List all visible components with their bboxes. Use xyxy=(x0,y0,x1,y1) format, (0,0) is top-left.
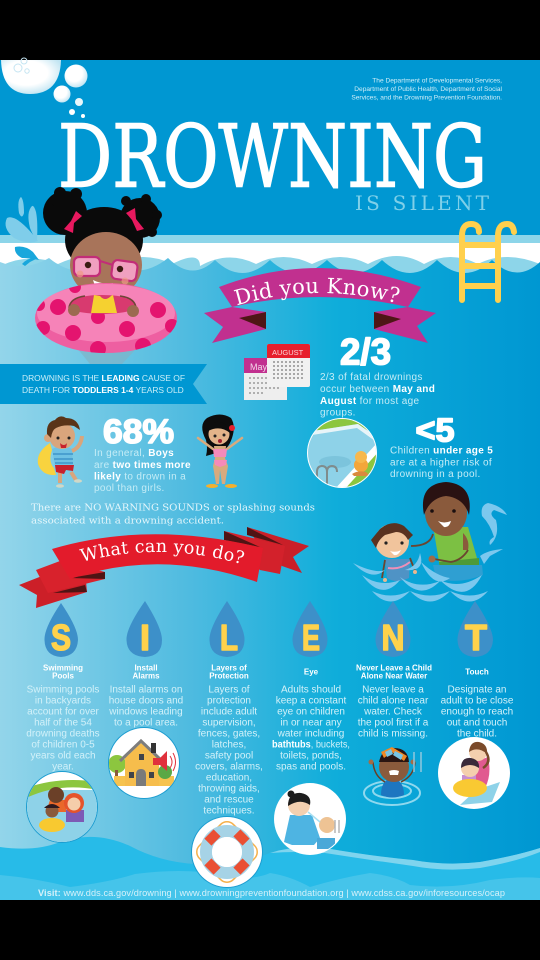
column: L layers of protection: Protection xyxy=(209,672,249,680)
icon: pool ladder xyxy=(462,224,514,300)
stat: two thirds: 2/3 of fatal drownings xyxy=(320,372,423,383)
illustration: life ring xyxy=(191,816,263,888)
column: L layers of protection: techniques. xyxy=(203,806,255,816)
column: E eye xyxy=(272,601,350,772)
credit text: The Department of Developmental Services, xyxy=(372,78,502,84)
column: I install alarms: Install xyxy=(134,664,158,672)
column: T touch: Designate an xyxy=(448,684,506,696)
column: I install alarms: windows leading xyxy=(108,706,183,718)
stat: under five: are at a higher risk of xyxy=(390,458,492,468)
column: T touch: the child. xyxy=(457,728,497,740)
column: L layers of protection: education, xyxy=(206,772,252,784)
icon: drop I: I xyxy=(140,617,150,658)
column: L layers of protection: supervision, xyxy=(202,718,256,728)
stat: 68 percent: In general, Boys xyxy=(94,448,174,459)
illustration: girls with yellow float xyxy=(438,737,510,809)
column: T touch: Touch xyxy=(465,668,489,676)
icon: drop T: T xyxy=(465,617,487,658)
icon: drop E: E xyxy=(302,617,320,658)
illustration: house with alarm xyxy=(108,727,180,799)
column: I install alarms: house doors and xyxy=(109,696,183,706)
column: L layers of protection: fences, gates, xyxy=(198,728,260,740)
banner heading: Did you Know? xyxy=(234,278,400,306)
column: S swimming pools: account for over xyxy=(27,706,100,718)
column: N never leave a child: child alone near xyxy=(358,696,429,706)
stat: two thirds xyxy=(320,332,435,418)
stat: two thirds: groups. xyxy=(320,408,356,418)
illustration: child in water with goggles xyxy=(364,747,421,805)
credit text xyxy=(351,78,503,102)
column: L layers of protection: Layers of xyxy=(211,664,247,672)
column: S swimming pools: Swimming pools xyxy=(27,684,99,696)
icon: drop S xyxy=(44,603,78,658)
column: S swimming pools: Swimming xyxy=(43,664,83,672)
text: no warning sounds: associated with a drowning accident. xyxy=(31,516,224,526)
stat: 68 percent: 68% xyxy=(103,413,174,451)
illustration: boy with yellow float xyxy=(38,416,82,488)
column: I install alarms: to a pool area. xyxy=(114,718,178,728)
stat: under five: <5 xyxy=(416,412,454,448)
column: L layers of protection: and rescue xyxy=(204,794,254,806)
column: L layers of protection: safety pool xyxy=(205,750,253,762)
stat: under five: drowning in a pool. xyxy=(390,469,481,480)
column: E eye: toilets, ponds, xyxy=(280,750,342,762)
column: N never leave a child: Alone Near Water xyxy=(361,672,427,680)
column: N never leave a child: Never leave a xyxy=(362,684,424,696)
icon: calendars: AUGUST xyxy=(272,348,304,357)
stat: two thirds: 2/3 xyxy=(340,332,391,372)
illustration: girl in pink swim ring xyxy=(33,187,179,364)
subtitle: IS SILENT xyxy=(355,191,490,215)
text: no warning sounds: There are NO WARNING SOUNDS or splashing sounds xyxy=(31,502,315,514)
column: E eye: spas and pools. xyxy=(276,762,346,772)
text: no warning sounds xyxy=(31,502,315,526)
stat: 68 percent: likely to drown in a xyxy=(94,472,186,482)
icon: calendars xyxy=(244,344,310,400)
column: N never leave a child: water. Check xyxy=(363,706,423,718)
column: E eye: water including xyxy=(277,728,344,740)
column: E eye: Eye xyxy=(304,668,319,676)
column: E eye: Adults should xyxy=(281,684,341,696)
illustration: mother watching child xyxy=(274,783,346,855)
column: L layers of protection: latches, xyxy=(212,740,246,750)
stat: two thirds: August for most age xyxy=(320,396,420,407)
icon: drop N: N xyxy=(382,617,404,658)
stat: under five xyxy=(390,412,493,480)
icon: drop S: S xyxy=(51,617,71,658)
illustration: girl in pink bikini xyxy=(198,414,242,488)
column: T touch xyxy=(441,601,514,740)
stat: two thirds: occur between May and xyxy=(320,384,435,395)
icon: water splash left xyxy=(6,197,39,266)
stat: under five: Children under age 5 xyxy=(390,446,493,456)
column: S swimming pools: in backyards xyxy=(35,696,91,706)
bottom waves xyxy=(0,837,540,900)
stat: 68 percent xyxy=(94,413,191,494)
stat: 68 percent: pool than girls. xyxy=(94,483,165,494)
column: L layers of protection: throwing aids, xyxy=(198,784,260,794)
column: S swimming pools: year. xyxy=(52,762,74,772)
pool edge and waves xyxy=(0,235,540,900)
illustration: child at pool edge xyxy=(306,418,380,490)
column: S swimming pools: Pools xyxy=(52,672,74,680)
column: S swimming pools xyxy=(26,603,100,772)
illustration: children in pool xyxy=(26,771,98,844)
banner: did you know xyxy=(204,268,436,343)
stat: 68 percent: are two times more xyxy=(94,460,191,471)
column: E eye: keep a constant xyxy=(276,696,347,706)
column: N never leave a child xyxy=(356,601,432,740)
icon: calendars: May xyxy=(250,362,268,372)
column: T touch: enough to reach xyxy=(441,706,513,718)
column: L layers of protection: include adult xyxy=(201,706,257,718)
icon: large bubble and small bubbles xyxy=(1,58,88,118)
column: L layers of protection: covers, alarms, xyxy=(195,762,263,772)
column: S swimming pools: half of the 54 xyxy=(34,718,92,728)
column: I install alarms xyxy=(108,601,183,728)
column: E eye: in or near any xyxy=(280,718,342,728)
banner heading: What can you do? xyxy=(79,542,244,564)
column: E eye: eye on children xyxy=(277,706,345,718)
column: E eye: bathtubs, buckets, xyxy=(272,740,350,750)
column: S swimming pools: of children 0-5 xyxy=(31,740,95,750)
column: T touch: adult to be close xyxy=(441,696,514,706)
column: N never leave a child: Never Leave a Child xyxy=(356,664,432,672)
credit text: Services, and the Drowning Prevention Foundation. xyxy=(351,94,502,102)
column: L layers of protection: Layers of xyxy=(208,684,250,696)
icon: drop L: L xyxy=(220,617,238,658)
callout: leading cause: DROWNING IS THE LEADING CAUSE OF xyxy=(22,373,185,383)
column: S swimming pools: drowning deaths xyxy=(26,728,100,740)
icon: drop L xyxy=(209,601,245,658)
column: I install alarms: Alarms xyxy=(132,672,160,680)
column: L layers of protection xyxy=(195,601,263,816)
column: I install alarms: Install alarms on xyxy=(110,684,182,696)
column: L layers of protection: protection xyxy=(207,696,251,706)
column: N never leave a child: child is missing. xyxy=(358,728,428,740)
illustration: adult and child in water xyxy=(353,482,507,602)
column: S swimming pools: years old each xyxy=(30,750,96,762)
banner: what can you do xyxy=(19,527,309,608)
callout: leading cause xyxy=(0,364,207,404)
credit text: Department of Public Health, Department of Social xyxy=(354,86,503,93)
column: T touch: out and touch xyxy=(447,718,507,728)
callout: leading cause: DEATH FOR TODDLERS 1-4 YEARS OLD xyxy=(22,385,184,395)
footer links: Visit: www.dds.ca.gov/drowning | www.drowningpreventionfoundation.org | www.cdss.ca.gov/inforesources/ocap xyxy=(38,888,505,898)
icon: drop E xyxy=(292,601,328,658)
column: N never leave a child: the pool first if a xyxy=(358,718,429,728)
